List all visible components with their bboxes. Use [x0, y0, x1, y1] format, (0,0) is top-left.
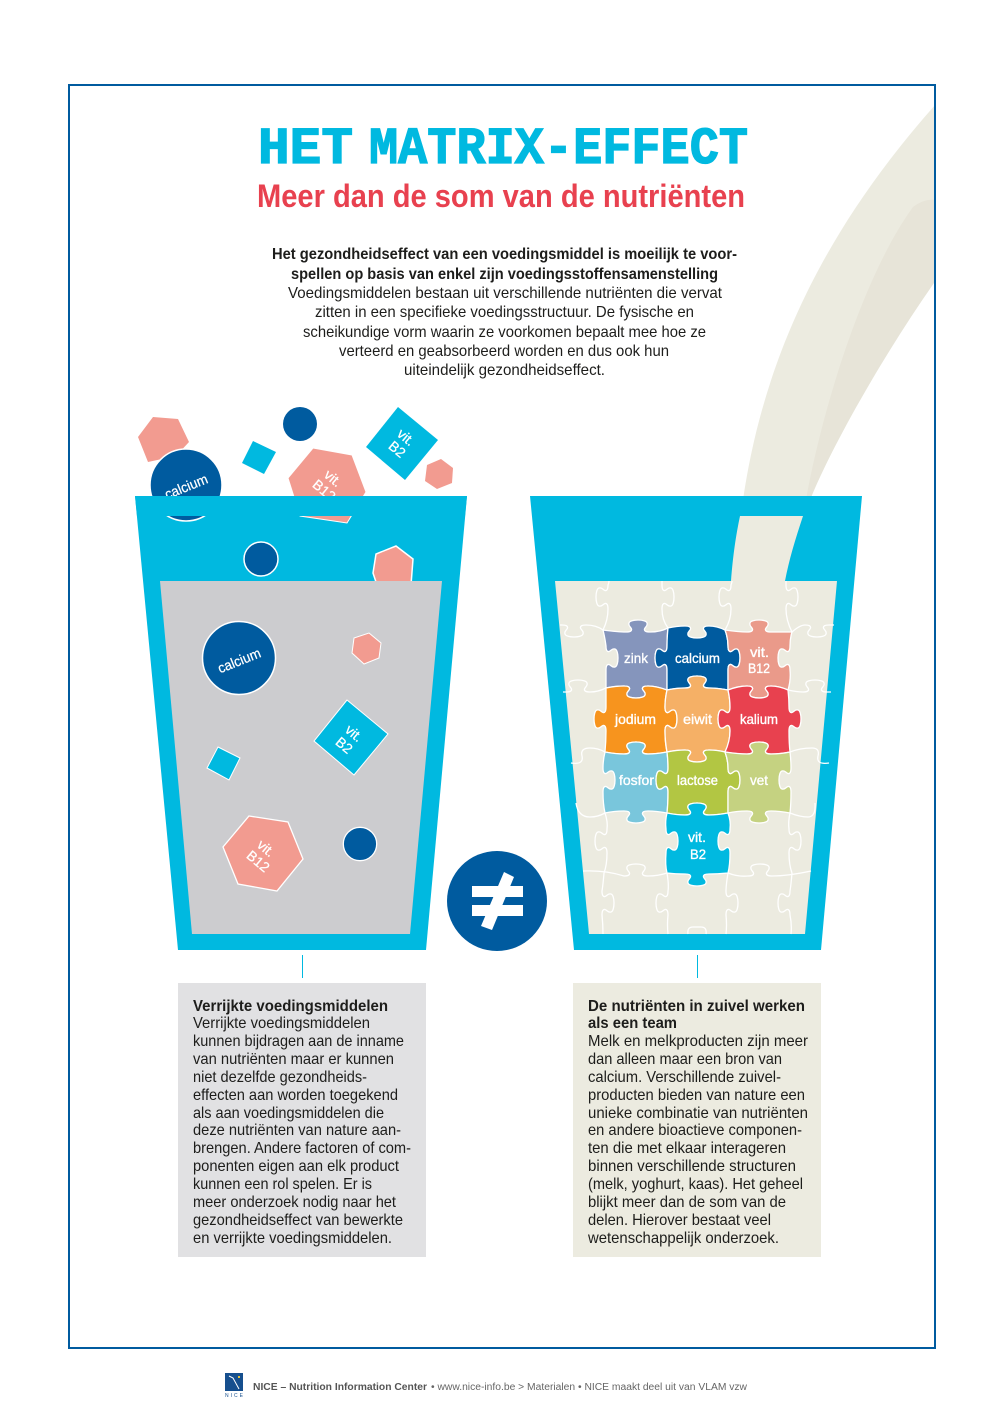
glass body	[530, 496, 862, 950]
puzzle piece: lactose	[656, 750, 740, 815]
icon: salmon hexagon top left	[138, 417, 189, 462]
puzzle piece: eiwit: eiwit	[683, 711, 712, 727]
subtitle: Meer dan de som van de nutriënten	[257, 178, 745, 214]
panel: nutriënten in zuivel	[573, 983, 821, 1257]
panel body text: (melk, yoghurt, kaas). Het geheel	[588, 1176, 803, 1193]
panel body text	[193, 1015, 411, 1247]
panel body text: niet dezelfde gezondheids-	[193, 1069, 367, 1086]
puzzle piece: vet	[725, 742, 791, 823]
puzzle piece: vit. B2: B2	[690, 846, 706, 862]
title: MATRIX-EFFECT	[369, 120, 748, 179]
panel body text: Verrijkte voedingsmiddelen	[193, 1015, 370, 1032]
intro text: verteerd en geabsorbeerd worden en dus ook hun	[339, 343, 669, 360]
panel body text: wetenschappelijk onderzoek.	[587, 1230, 779, 1247]
title: HET	[258, 120, 353, 179]
grey liquid	[160, 581, 442, 934]
footer text: • www.nice-info.be > Materialen • NICE maakt deel uit van VLAM vzw	[431, 1382, 748, 1393]
panel body text: meer onderzoek nodig naar het	[193, 1194, 396, 1211]
panel body text: calcium. Verschillende zuivel-	[588, 1069, 781, 1086]
icon: blue circle in liquid	[343, 827, 377, 861]
icon: salmon hexagon in glass rim	[373, 546, 413, 585]
puzzle piece: vit. B12: B12	[748, 660, 770, 676]
puzzle piece: vit. B12: vit.	[750, 644, 769, 660]
intro text: zitten in een specifieke voedingsstructuur. De fysische en	[315, 304, 694, 321]
icon: vit. B2 square in liquid: B2	[333, 734, 356, 757]
panel: verrijkte voedingsmiddelen	[178, 983, 426, 1257]
icon: vit. B2 square in liquid	[314, 700, 388, 775]
intro text: Voedingsmiddelen bestaan uit verschillende nutriënten die vervat	[288, 285, 723, 302]
milk stream	[743, 104, 936, 500]
icon: vit. B12 hexagon in liquid	[223, 816, 303, 891]
puzzle piece: calcium: calcium	[675, 650, 720, 666]
icon: calcium circle in liquid	[202, 622, 276, 694]
puzzle piece: fosfor: fosfor	[619, 772, 654, 788]
icon: NICE logo	[225, 1373, 244, 1399]
footer text: NICE – Nutrition Information Center	[253, 1382, 427, 1393]
icon: vit. B2 square above glass: B2	[386, 438, 409, 461]
intro text: Het gezondheidseffect van een voedingsmiddel is moeilijk te voor-	[272, 246, 737, 263]
puzzle piece: zink	[603, 620, 668, 698]
icon: small salmon hexagon	[425, 459, 453, 489]
panel body text: gezondheidseffect van bewerkte	[193, 1212, 403, 1229]
background puzzle lines	[560, 581, 834, 934]
icon: vit. B2 square above glass	[366, 407, 438, 480]
panel body text: deze nutriënten van nature aan-	[193, 1122, 401, 1139]
connector right	[697, 955, 698, 978]
icon: calcium circle in liquid: calcium	[215, 645, 263, 676]
icon: calcium circle above glass: calcium	[162, 471, 210, 502]
intro text: scheikundige vorm waarin ze voorkomen bepaalt mee hoe ze	[303, 324, 706, 341]
intro text: uiteindelijk gezondheidseffect.	[404, 362, 605, 379]
icon: vit. B12 hexagon above glass: vit.	[321, 466, 345, 490]
panel body text: blijkt meer dan de som van de	[588, 1194, 786, 1211]
panel body text: kunnen een rol spelen. Er is	[193, 1176, 372, 1193]
panel body text: van nutriënten maar er kunnen	[193, 1051, 394, 1068]
panel body text	[587, 1033, 809, 1247]
panel body text: kunnen bijdragen aan de inname	[193, 1033, 404, 1050]
icon: vit. B12 hexagon in liquid: vit.	[254, 836, 278, 860]
icon: vit. B12 hexagon in liquid: B12	[244, 847, 273, 875]
puzzle piece: lactose: lactose	[677, 772, 718, 788]
panel body text: ponenten eigen aan elk product	[193, 1158, 400, 1175]
icon: small blue square	[242, 441, 276, 474]
panel body text: effecten aan worden toegekend	[193, 1087, 398, 1104]
icon: NICE logo: N I C E	[225, 1393, 244, 1399]
icon: vit. B12 hexagon above glass	[288, 448, 366, 523]
puzzle piece: jodium: jodium	[614, 711, 656, 727]
panel body text: en andere bioactieve componen-	[588, 1122, 802, 1139]
right glass: dairy matrix	[530, 496, 862, 950]
panel heading: De nutriënten in zuivel werken	[588, 998, 805, 1015]
panel heading	[588, 998, 805, 1032]
left glass: fortified food	[135, 407, 467, 950]
glass body	[135, 496, 467, 950]
icon: small square in liquid	[207, 747, 240, 780]
icon: dark blue circle	[283, 407, 317, 441]
puzzle piece: kalium: kalium	[740, 711, 778, 727]
puzzle piece: vet: vet	[750, 772, 768, 788]
not-equal icon	[447, 851, 547, 951]
panel body text: brengen. Andere factoren of com-	[193, 1140, 411, 1157]
panel heading: als een team	[588, 1015, 677, 1032]
footer text	[253, 1382, 748, 1393]
panel body text: dan alleen maar een bron van	[588, 1051, 782, 1068]
puzzle piece: eiwit	[665, 676, 730, 762]
panel body text: producten bieden van nature een	[588, 1087, 805, 1104]
puzzle piece: fosfor	[603, 742, 668, 823]
panel body text: ten die met elkaar interageren	[588, 1140, 786, 1157]
panel body text: delen. Hierover bestaat veel	[588, 1212, 771, 1229]
panel body text: binnen verschillende structuren	[588, 1158, 796, 1175]
panel body text: Melk en melkproducten zijn meer	[588, 1033, 809, 1050]
icon: calcium circle above glass	[150, 449, 222, 521]
glass rim band	[135, 496, 467, 516]
panel body text: en verrijkte voedingsmiddelen.	[193, 1230, 392, 1247]
panel heading: Verrijkte voedingsmiddelen	[193, 998, 388, 1015]
icon: small hexagon in liquid	[352, 633, 381, 664]
connector left	[302, 955, 303, 978]
icon: vit. B2 square above glass: vit.	[394, 425, 418, 449]
intro text	[272, 246, 737, 379]
puzzle piece: calcium	[655, 626, 740, 690]
panel body text: unieke combinatie van nutriënten	[588, 1105, 808, 1122]
icon: vit. B12 hexagon above glass: B12	[310, 476, 339, 504]
intro text: spellen op basis van enkel zijn voedingsstoffensamenstelling	[291, 266, 718, 283]
puzzle piece: vit. B12	[725, 620, 792, 698]
panel body text: als aan voedingsmiddelen die	[193, 1105, 384, 1122]
page frame	[69, 85, 935, 1348]
icon: blue circle in glass rim	[244, 542, 278, 576]
puzzle piece: zink: zink	[624, 650, 649, 666]
puzzle piece: kalium	[718, 686, 801, 754]
puzzle piece: vit. B2: vit.	[688, 829, 706, 845]
milk in glass	[555, 516, 837, 934]
icon: vit. B2 square in liquid: vit.	[342, 721, 366, 745]
puzzle piece: jodium	[594, 686, 677, 754]
puzzle piece: vit. B2	[666, 803, 730, 886]
